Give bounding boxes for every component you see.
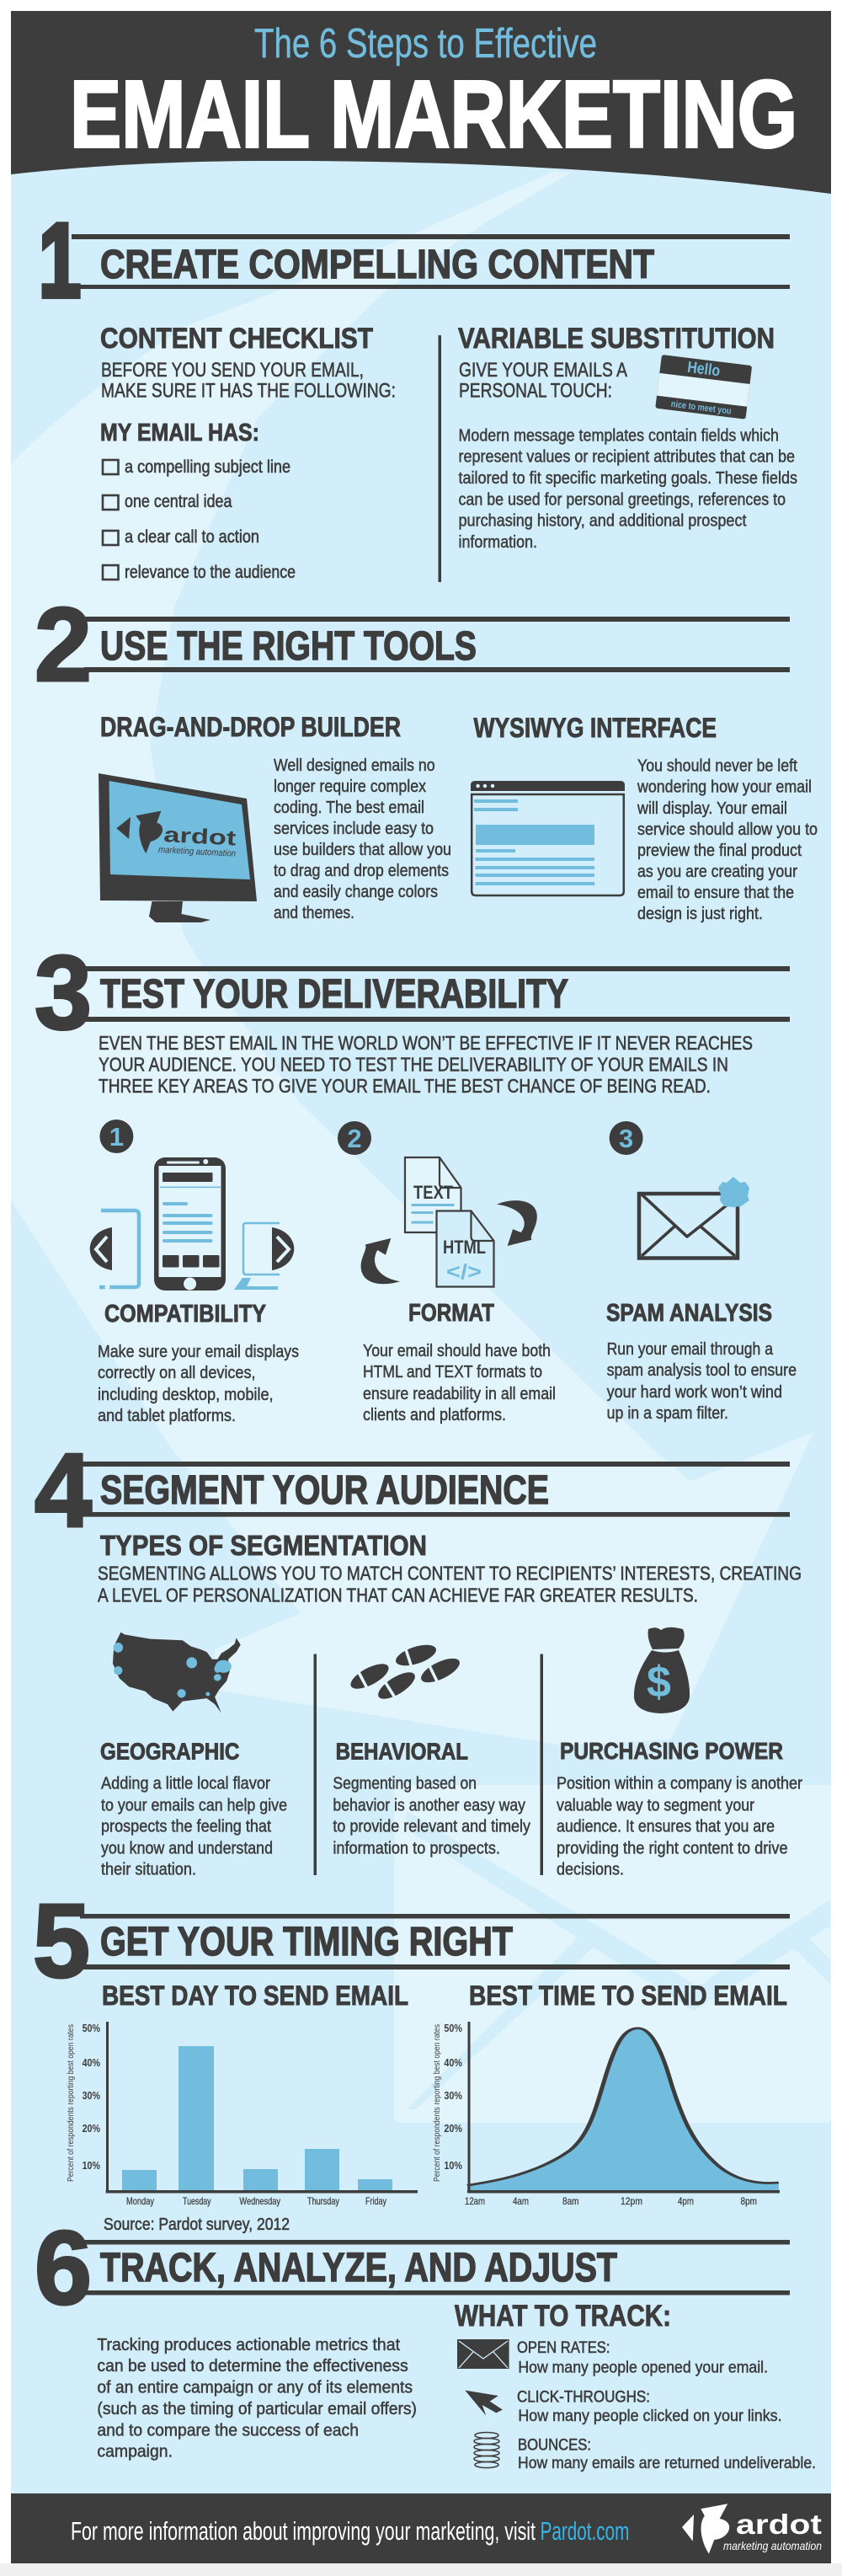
bar chart: best day: Friday [365, 2195, 386, 2207]
number 3: 3 [35, 935, 92, 1051]
icon: envelope with spam badge [639, 1177, 749, 1259]
icon: money bag: $ [647, 1658, 671, 1707]
icon: hello name tag: nice to meet you [670, 399, 732, 416]
format column: FORMAT [408, 1300, 494, 1327]
icon: desktop monitor with logo: ardot [163, 823, 237, 851]
tracking paragraph: can be used to determine the effectiveness [97, 2357, 408, 2376]
behavioral column [333, 1739, 530, 1858]
area chart: best time: Percent of respondents reporting best open rates [433, 2024, 442, 2182]
drag and drop heading: DRAG-AND-DROP BUILDER [100, 712, 401, 742]
bounces text: How many emails are returned undeliverable. [518, 2454, 816, 2472]
tracking paragraph: of an entire campaign or any of its elements [97, 2379, 413, 2397]
area chart: best time: 4am [513, 2195, 529, 2207]
panel: step 6 track, analyze, and adjust [35, 2210, 816, 2472]
checklist items [103, 457, 296, 582]
bounces text: BOUNCES: [518, 2437, 591, 2455]
icon: envelope [457, 2339, 509, 2369]
open rates text [517, 2339, 768, 2377]
area chart: best time: 8pm [741, 2195, 757, 2207]
behavioral column: BEHAVIORAL [336, 1739, 468, 1764]
intro paragraph: A LEVEL OF PERSONALIZATION THAT CAN ACHIEVE FAR GREATER RESULTS. [98, 1584, 698, 1606]
wysiwyg paragraph: You should never be left [637, 757, 797, 776]
icon: hello name tag [655, 355, 752, 420]
footer logo [682, 2504, 822, 2554]
section rules [72, 234, 790, 289]
tracking paragraph: and to compare the success of each [97, 2422, 359, 2440]
spam analysis column: SPAM ANALYSIS [606, 1300, 772, 1327]
intro paragraph [99, 1032, 753, 1097]
area chart: best time: 30% [444, 2089, 462, 2102]
icon: text and html documents [405, 1157, 493, 1287]
intro paragraph: THREE KEY AREAS TO GIVE YOUR EMAIL THE BEST CHANCE OF BEING READ. [99, 1075, 711, 1097]
geographic column: prospects the feeling that [101, 1818, 271, 1836]
tracking paragraph [97, 2336, 417, 2461]
section rules [84, 966, 790, 1022]
purchasing power column [557, 1738, 802, 1879]
purchasing power column: audience. It ensures that you are [557, 1818, 775, 1836]
best day heading: BEST DAY TO SEND EMAIL [102, 1980, 408, 2011]
drag and drop paragraph: services include easy to [274, 820, 434, 838]
compatibility column: including desktop, mobile, [98, 1386, 274, 1404]
variable substitution paragraph: tailored to fit specific marketing goals. These fields [458, 469, 797, 488]
what to track heading: WHAT TO TRACK: [455, 2300, 671, 2333]
icon: cursor arrow [465, 2391, 503, 2416]
geographic column: GEOGRAPHIC [100, 1739, 239, 1764]
heading: SEGMENT YOUR AUDIENCE [100, 1468, 549, 1513]
checklist items: a compelling subject line [125, 457, 290, 477]
geographic column: Adding a little local flavor [101, 1775, 270, 1793]
bar chart: best day: Wednesday [239, 2195, 280, 2207]
types of segmentation heading: TYPES OF SEGMENTATION [100, 1530, 427, 1561]
wysiwyg paragraph: design is just right. [637, 905, 763, 923]
number 4: 4 [35, 1433, 92, 1549]
area chart: best time: 10% [444, 2159, 462, 2172]
open rates text: How many people opened your email. [518, 2359, 768, 2377]
icon: number badge 2: 2 [347, 1124, 362, 1153]
variable substitution heading: VARIABLE SUBSTITUTION [458, 323, 775, 355]
checklist intro [101, 359, 396, 403]
section rules [80, 1914, 790, 1969]
section rules [84, 617, 790, 672]
panel: step 4 segment your audience [35, 1433, 802, 1879]
icon: text and html documents: </> [446, 1260, 482, 1284]
spam analysis column: your hard work won’t wind [607, 1383, 782, 1402]
format column: Your email should have both [363, 1342, 551, 1360]
variable substitution paragraph: represent values or recipient attributes that can be [458, 448, 795, 467]
compatibility column: correctly on all devices, [98, 1364, 256, 1382]
arrow: right cycle arrow [497, 1200, 537, 1246]
icon: hello name tag: Hello [686, 359, 721, 380]
spam analysis column [606, 1300, 797, 1423]
bar chart: best day: 20% [83, 2122, 100, 2135]
area chart: best time: 12am [465, 2195, 485, 2207]
area chart: best time: 50% [444, 2022, 462, 2034]
heading: TEST YOUR DELIVERABILITY [100, 972, 568, 1017]
format column [363, 1300, 556, 1424]
format column: clients and platforms. [363, 1406, 506, 1424]
tracking paragraph: Tracking produces actionable metrics that [97, 2336, 400, 2354]
area chart: best time: 8am [562, 2195, 579, 2207]
checklist intro: MAKE SURE IT HAS THE FOLLOWING: [101, 379, 396, 403]
personal touch text: PERSONAL TOUCH: [459, 379, 612, 403]
drag and drop paragraph: and easily change colors [274, 883, 438, 901]
panel: step 5 get your timing right [33, 1884, 790, 2234]
panel: step 3 test your deliverability [35, 935, 797, 1425]
geographic column: to your emails can help give [101, 1797, 287, 1815]
behavioral column: information to prospects. [333, 1840, 500, 1858]
number 2: 2 [35, 587, 92, 703]
icon: number badge 3 [610, 1121, 643, 1155]
checklist items: relevance to the audience [125, 563, 296, 582]
geographic column [100, 1739, 287, 1879]
source note: Source: Pardot survey, 2012 [104, 2215, 290, 2234]
intro paragraph [98, 1563, 802, 1606]
variable substitution paragraph: Modern message templates contain fields which [458, 426, 779, 445]
wysiwyg paragraph: service should allow you to [637, 820, 818, 839]
behavioral column: to provide relevant and timely [333, 1818, 530, 1836]
drag and drop paragraph: and themes. [274, 904, 354, 922]
purchasing power column: decisions. [557, 1860, 624, 1879]
bar chart: best day: 10% [83, 2159, 100, 2172]
heading: GET YOUR TIMING RIGHT [100, 1920, 513, 1964]
personal touch text: GIVE YOUR EMAILS A [459, 359, 628, 382]
icon: number badge 2 [338, 1121, 371, 1155]
compatibility column: Make sure your email displays [98, 1343, 299, 1361]
drag and drop paragraph: coding. The best email [274, 799, 424, 817]
icon: desktop monitor with logo: marketing automation [158, 845, 236, 859]
icon: US map with dots [113, 1633, 241, 1713]
number 1: 1 [39, 203, 81, 319]
checklist items: one central idea [125, 492, 232, 511]
icon: devices [90, 1157, 294, 1291]
bounces text [518, 2437, 816, 2472]
icon: spring [474, 2433, 499, 2468]
spam analysis column: Run your email through a [607, 1340, 774, 1359]
click-throughs text: How many people clicked on your links. [518, 2407, 782, 2425]
header banner [11, 11, 831, 194]
area chart: best time: 40% [444, 2056, 462, 2069]
arrow: left cycle arrow [361, 1238, 400, 1284]
behavioral column: Segmenting based on [333, 1775, 477, 1793]
wysiwyg heading: WYSIWYG INTERFACE [473, 713, 717, 743]
drag and drop paragraph [274, 756, 451, 922]
area chart: best time: 12pm [621, 2195, 642, 2207]
footer call to action: For more information about improving your marketing, visit [71, 2516, 536, 2546]
footer logo: ardot [736, 2509, 822, 2540]
panel: step 1 create compelling content [39, 203, 797, 582]
purchasing power column: valuable way to segment your [557, 1797, 754, 1815]
heading: CREATE COMPELLING CONTENT [100, 243, 654, 287]
panel: step 2 use the right tools [35, 587, 818, 923]
section rules [80, 1462, 790, 1517]
intro paragraph: YOUR AUDIENCE. YOU NEED TO TEST THE DELIVERABILITY OF YOUR EMAILS IN [99, 1054, 728, 1076]
geographic column: their situation. [101, 1860, 196, 1879]
bar chart: best day: Monday [126, 2195, 154, 2207]
click-throughs text: CLICK-THROUGHS: [517, 2389, 650, 2407]
icon: text and html documents: TEXT [413, 1182, 453, 1203]
wysiwyg paragraph: as you are creating your [637, 863, 797, 881]
tracking paragraph: campaign. [97, 2443, 173, 2461]
variable substitution paragraph: can be used for personal greetings, references to [458, 491, 786, 510]
tracking paragraph: (such as the timing of particular email offers) [97, 2400, 417, 2418]
icon: text and html documents: HTML [443, 1237, 486, 1258]
icon: number badge 1: 1 [109, 1122, 124, 1152]
spam analysis column: up in a spam filter. [607, 1404, 728, 1423]
variable substitution paragraph [458, 426, 797, 552]
drag and drop paragraph: to drag and drop elements [274, 862, 449, 880]
bar chart: best day: Tuesday [183, 2195, 211, 2207]
bar chart: best day: 40% [83, 2056, 100, 2069]
content checklist heading: CONTENT CHECKLIST [100, 323, 373, 355]
number 5: 5 [33, 1884, 90, 2000]
bar chart: best day: Thursday [307, 2195, 339, 2207]
behavioral column: behavior is another easy way [333, 1797, 525, 1815]
best time heading: BEST TIME TO SEND EMAIL [469, 1980, 787, 2011]
number 6: 6 [35, 2210, 92, 2327]
wysiwyg paragraph: will display. Your email [637, 799, 787, 818]
icon: desktop monitor with logo [99, 773, 257, 922]
format column: HTML and TEXT formats to [363, 1363, 542, 1382]
icon: browser window [471, 781, 625, 895]
icon: footprints [346, 1639, 464, 1705]
checklist items: a clear call to action [125, 527, 259, 547]
variable substitution paragraph: information. [458, 533, 537, 552]
wysiwyg paragraph: wondering how your email [637, 778, 812, 797]
icon: money bag [634, 1627, 690, 1713]
drag and drop paragraph: Well designed emails no [274, 756, 435, 775]
format column: ensure readability in all email [363, 1385, 556, 1403]
compatibility column: and tablet platforms. [98, 1407, 236, 1425]
subtitle: The 6 Steps to Effective [254, 21, 597, 67]
heading: USE THE RIGHT TOOLS [100, 624, 477, 669]
bar chart: best day: 50% [83, 2022, 100, 2034]
wysiwyg paragraph: email to ensure that the [637, 884, 794, 902]
drag and drop paragraph: longer require complex [274, 778, 426, 796]
wysiwyg paragraph: preview the final product [637, 842, 802, 860]
purchasing power column: PURCHASING POWER [560, 1738, 783, 1764]
personal touch text [459, 359, 628, 403]
footer [11, 2493, 831, 2563]
icon: number badge 3: 3 [619, 1124, 633, 1153]
compatibility column: COMPATIBILITY [104, 1301, 266, 1328]
click-throughs text [517, 2389, 782, 2425]
purchasing power column: providing the right content to drive [557, 1840, 788, 1858]
bar chart: best day: 30% [83, 2089, 100, 2102]
purchasing power column: Position within a company is another [557, 1775, 802, 1793]
geographic column: you know and understand [101, 1840, 273, 1858]
compatibility column [98, 1301, 299, 1425]
checklist intro: BEFORE YOU SEND YOUR EMAIL, [101, 359, 364, 382]
footer link: Pardot.com [541, 2516, 629, 2546]
my email has heading: MY EMAIL HAS: [100, 420, 259, 446]
open rates text: OPEN RATES: [517, 2339, 610, 2357]
icon: number badge 1 [99, 1120, 133, 1153]
heading: TRACK, ANALYZE, AND ADJUST [100, 2246, 617, 2290]
spam analysis column: spam analysis tool to ensure [607, 1361, 797, 1380]
area chart: best time: 4pm [678, 2195, 694, 2207]
bar chart: best day [67, 2022, 418, 2207]
section rules [80, 2240, 790, 2295]
wysiwyg paragraph [637, 757, 818, 923]
drag and drop paragraph: use builders that allow you [274, 841, 451, 859]
variable substitution paragraph: purchasing history, and additional prospect [458, 511, 747, 530]
area chart: best time: 20% [444, 2122, 462, 2135]
bar chart: best day: Percent of respondents reporting best open rates [67, 2024, 76, 2182]
footer logo: marketing automation [723, 2539, 822, 2552]
area chart: best time [433, 2022, 780, 2207]
